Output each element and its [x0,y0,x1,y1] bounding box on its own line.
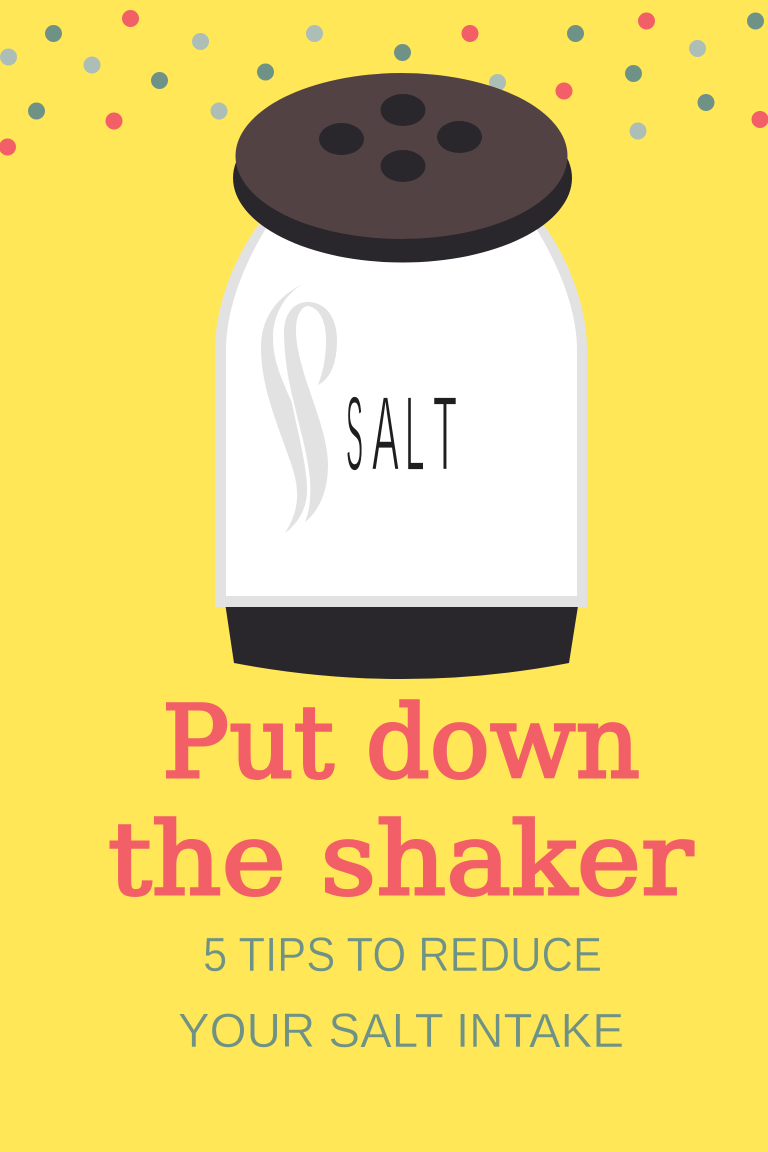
glass highlight swirl [261,283,337,533]
jar interior [226,225,577,596]
subtitle: YOUR SALT INTAKE [178,1005,624,1058]
jar label: SALT: A [372,373,399,492]
glass jar [215,220,587,607]
salt shaker [215,73,587,679]
title: Put down [162,684,640,801]
lid holes [319,94,482,182]
lid top [236,73,568,239]
lid rim [233,94,572,262]
jar label: SALT [346,373,457,493]
title: the shaker [108,801,693,918]
jar label: SALT: L [405,375,424,493]
title [108,684,693,918]
jar label: SALT: T [433,375,457,493]
confetti dots [0,10,768,156]
jar label: SALT: S [346,375,363,493]
shaker base [226,606,578,679]
subtitle [178,929,624,1058]
subtitle: 5 TIPS TO REDUCE [203,929,602,982]
